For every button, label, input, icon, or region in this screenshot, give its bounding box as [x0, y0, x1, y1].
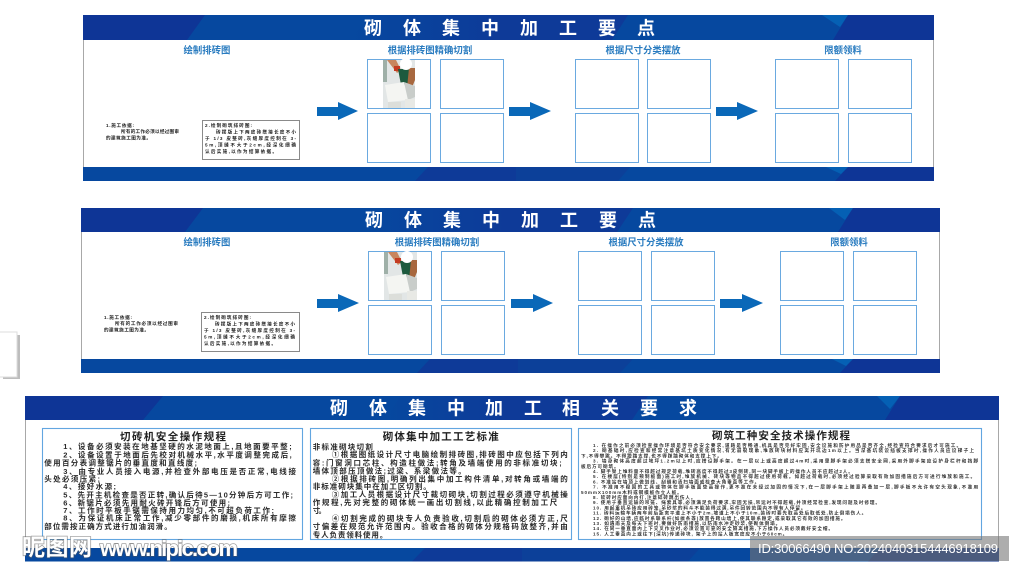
rules list: masonry worker: 12. 砌好的山墙,应临时系联系杆(如檩条等)放置各跨山墙上,使其联系稳定,或采取其它有效的加固措施。 — [593, 515, 846, 522]
arrows middle board — [317, 294, 763, 312]
text box: masonry layout drawing: 认后实施,以作为结算依据。 — [205, 148, 277, 155]
small cropped white card at left edge — [0, 332, 20, 379]
rules list: masonry worker: 14. 在同一垂直面内上下交叉作业时,必须设置可靠的安全隔离措施,下方操作人员必须戴好安全帽。 — [593, 525, 834, 532]
rules list: brick cutter: 3、由专业人员接入电源,并检查外部电压是否正常,电线接 — [63, 466, 296, 476]
rules list: brick cutter: 头处必须压紧; — [44, 473, 100, 483]
rules list: masonry worker: 10. 用起重机吊砖应用砖笼,吊砂浆的料斗不能装得过满,吊件回转范围内不得有人停留。 — [593, 504, 806, 511]
standard text: ④切割完成的砌块专人负责验收,切割后的砌体必须方正,尺 — [332, 513, 568, 523]
watermark: image ID bar — [750, 536, 1009, 561]
text: construction basis: 的建筑施工图为准。 — [106, 134, 151, 141]
rules list: masonry worker: 11. 砖料运输车辆两车前后距离平道上不小于2m,坡道上不小于10m,装砖时要先取高处后取低处,防止倒塌伤人。 — [593, 510, 867, 517]
standard text: 非标准砌块切割 — [313, 442, 373, 452]
column headings middle board: 根据排砖图精确切割 — [395, 236, 479, 248]
text: construction basis — [106, 122, 179, 141]
footer band requirements — [25, 548, 999, 562]
header band upper board — [83, 15, 934, 40]
column headings upper board: 限额领料 — [824, 44, 862, 56]
text box: masonry layout drawing: 于 1/3 皮整砖,灰缝厚度控制在 3- — [205, 135, 296, 142]
header band requirements — [25, 396, 999, 420]
panel: related requirements board — [25, 396, 999, 562]
panel: brick cutter safety rules — [42, 428, 302, 540]
standard text: 作规程,先对完整的砌体统一画出切割线,以此精确控制加工尺 — [313, 497, 558, 507]
standard text: 寸。 — [313, 505, 326, 515]
header band middle board — [81, 208, 940, 232]
column headings middle board: 绘制排砖图 — [184, 236, 230, 248]
column headings upper board: 绘制排砖图 — [184, 44, 230, 56]
footer band middle board — [81, 359, 940, 373]
rules list: masonry worker: 3. 墙身砌体高度超过地坪1.2m以上时,应搭设脚手架。在一层以上或高度超过4m时,采用里脚手架必须支搭安全网,采用外脚手架应设护身栏杆和挡脚 — [593, 458, 979, 465]
text box: masonry layout drawing: 2.绘制砌筑排砖图: — [204, 314, 251, 321]
arrows upper board — [317, 102, 758, 120]
text box: masonry layout drawing: 5m,顶缝不大于2cm,经深化细确 — [204, 333, 295, 340]
rules list: masonry worker: 板后方可砌筑。 — [581, 463, 619, 470]
text box: masonry layout drawing — [202, 312, 300, 352]
standard text: 非标准砌块集中在加工区切割。 — [313, 481, 431, 491]
picture frames upper board — [368, 60, 912, 162]
column headings upper board: 根据尺寸分类摆放 — [605, 44, 681, 56]
standard text: 寸偏差在规范允许范围内。验收合格的砌体分规格码放整齐,并由 — [313, 521, 568, 531]
text box: masonry layout drawing: 2.绘制砌筑排砖图: — [205, 122, 252, 129]
panel: middle board — [81, 208, 940, 373]
photo: worker cutting block — [383, 58, 415, 108]
rules list: masonry worker — [581, 442, 979, 537]
rules list: brick cutter: 8、为保证机床正常工作,减少零部件的磨损,机床所有摩擦 — [63, 513, 296, 523]
heading: brick cutter safety rules: 切砖机安全操作规程 — [120, 430, 226, 443]
panel: masonry process standard — [310, 428, 572, 540]
rules list: masonry worker: 7. 不准用不稳固的工具或物体在脚手板面垫高操作,更不准在未经过加固的情况下,在一层脚手架上随意再叠加一层,脚手板不允许有空头现象,不准用 — [593, 484, 979, 491]
rules list: masonry worker: 50mmX100mm木料或钢模板作立人板。 — [581, 489, 683, 496]
picture frames middle board — [368, 252, 916, 354]
rules list: masonry worker: 6. 不准站在墙顶上做划线、刮缝和清扫墙面或检查大角垂直等工作。 — [593, 478, 760, 485]
text box: masonry layout drawing: 于 1/3 皮整砖,灰缝厚度控制在 3- — [204, 327, 295, 334]
footer band upper board — [83, 167, 934, 181]
watermark: nipic logo — [22, 534, 238, 561]
standard text: 专人负责领料使用。 — [313, 529, 387, 539]
text box: masonry layout drawing — [202, 120, 300, 160]
rules list: masonry worker: 2. 砌基础时,应检查和经常注意基坑土质变化情况,有无崩裂现象,堆放砖块材料应离开坑边1m以上。当深基坑装设挡板支撑时,操作人员应设梯子上 — [593, 447, 975, 454]
rules list: masonry worker: 9. 使用于垂直运输的吊笼、绳索具等,必须满足负荷要求,牢固无损,吊运时不得超载,并须经常检查,发现问题及时修理。 — [593, 499, 881, 506]
rules list: brick cutter: 6、新锯片必须先用耐火砖开锋后方可使用; — [63, 497, 230, 507]
watermark: nipic logo: 昵图网 — [22, 534, 92, 560]
text box: masonry layout drawing: 5m,顶缝不大于2cm,经深化细确 — [205, 141, 296, 148]
rules list: masonry worker: 5. 在楼层(特别是预制板面)施工时,堆放机械、砖块等物品不得超过使用荷载。如超过荷载时,必须经过验算采取有效加固措施后方可进行堆放和施工。 — [593, 473, 976, 480]
panel: upper board — [83, 15, 934, 181]
rules list: masonry worker: 4. 脚手架上堆料量不得超过规定荷载,堆砖高度不得超过3皮侧砖,同一块脚手板上的操作人员不应超过2人。 — [593, 468, 854, 475]
rules list: masonry worker: 15. 人工垂直向上或往下(深坑)传递砖块, 架子上的站人板宽度应不小于60cm。 — [593, 530, 788, 537]
standard text: ②根据排砖图,明确列出集中加工构件清单,对转角或墙端的 — [332, 473, 568, 483]
standard text: ③加工人员根据设计尺寸裁切砌块,切割过程必须遵守机械操 — [332, 489, 568, 499]
rules list: brick cutter: 5、先开主机检查是否正转,确认后待5—10分钟后方可工作; — [63, 489, 293, 499]
text box: masonry layout drawing: 认后实施,以作为结算依据。 — [204, 340, 276, 347]
column headings middle board — [184, 236, 868, 248]
standard text: 墙体顶部压顶做法;过梁、系梁做法等。 — [313, 465, 466, 475]
title middle board: 砌体集中加工要点 — [365, 210, 656, 230]
rules list: masonry worker: 13. 如遇雨天及每天下班时,要做好防雨措施,以防雨水冲走砂浆,使砌体倒塌。 — [593, 520, 781, 527]
rules list: brick cutter: 4、接好水源; — [63, 481, 116, 491]
title requirements: 砌体集中加工相关要求 — [330, 398, 697, 418]
watermark: nipic logo: www.nipic.com — [99, 536, 238, 561]
heading: masonry process standard: 砌体集中加工工艺标准 — [383, 430, 499, 443]
column headings upper board: 根据排砖图精确切割 — [388, 44, 472, 56]
text: construction basis: 1.施工依据: — [104, 314, 132, 321]
text: construction basis — [104, 314, 178, 333]
panel: masonry worker safety rules — [578, 428, 982, 540]
column headings middle board: 限额领料 — [830, 236, 868, 248]
column headings upper board — [184, 44, 862, 56]
title upper board: 砌体集中加工要点 — [364, 18, 655, 38]
photo: worker cutting block — [384, 251, 417, 300]
heading: masonry worker safety rules: 砌筑工种安全技术操作规程 — [712, 429, 850, 442]
standard text: 容:门窗洞口芯柱、构造柱做法;转角及墙端使用的非标准切块; — [313, 457, 562, 467]
text: construction basis: 1.施工依据: — [106, 122, 134, 129]
rules list: masonry worker: 1. 在操作之前必须检查操作环境是否符合安全要求,道路是否畅通,机具是否完好牢固,安全设施和防护用品是否齐全,经检查符合要求后才可施工。 — [593, 442, 962, 449]
rules list: brick cutter: 1、设备必须安装在地基坚硬的水泥地面上,且地面要平整; — [63, 441, 292, 451]
standard text — [313, 442, 568, 539]
watermark: image ID bar: ID:30066490 NO:20240403154446918109 — [758, 541, 998, 556]
column headings middle board: 根据尺寸分类摆放 — [608, 236, 684, 248]
rules list: brick cutter: 2、设备设置于地面后先校对机械水平,水平度调整完成后, — [63, 449, 292, 459]
rules list: brick cutter: 使用百分表调整锯片的垂直度和直线度; — [44, 457, 197, 467]
text box: masonry layout drawing: 砖摆版上下两皮砖搭接长度不小 — [215, 321, 295, 328]
rules list: masonry worker: 下,不得攀跳。不得蹬踏支撑,也不得踩踏砌体和支撑上下。 — [581, 452, 723, 459]
text: construction basis: 所有的工作必须以经过图审 — [121, 128, 179, 135]
text box: masonry layout drawing: 砖摆版上下两皮砖搭接长度不小 — [216, 129, 296, 136]
rules list: brick cutter — [44, 441, 296, 531]
rules list: brick cutter: 7、工作时平板手锯需保持用力均匀,不可超负荷工作; — [63, 505, 274, 515]
text: construction basis: 所有的工作必须以经过图审 — [115, 320, 178, 327]
rules list: masonry worker: 8. 砍砖时应面向内打,注意碎砖跳出伤人。 — [593, 494, 696, 501]
standard text: ①根据图纸设计尺寸电脑绘制排砖图,排砖图中应包括下列内 — [332, 449, 568, 459]
text: construction basis: 的建筑施工图为准。 — [104, 326, 149, 333]
rules list: brick cutter: 部位需按正确方式进行加油润滑。 — [44, 521, 172, 531]
